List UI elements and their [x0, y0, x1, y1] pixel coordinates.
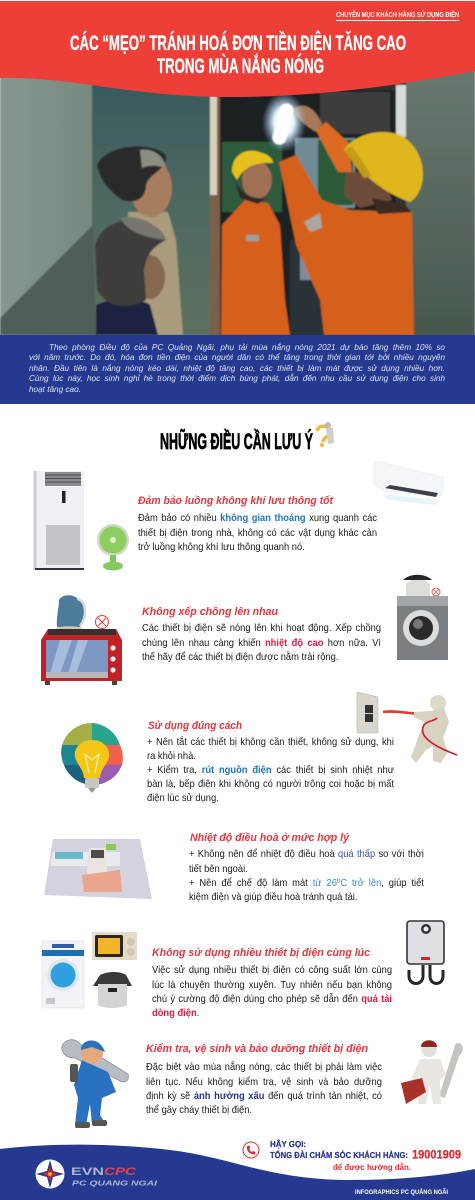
- body text: bàn là, bếp điện khi không có người trông coi hoặc bị mất: [147, 779, 394, 790]
- body text: [138, 513, 377, 553]
- heading: things to note: NHỮNG ĐIỀU CẦN LƯU Ý: [160, 429, 313, 454]
- logo: EVNCPC PC Quang Ngai: PC QUANG NGAI: [72, 1178, 158, 1188]
- body text: + Không nên để nhiệt độ điều hoà quá thấp so với thời: [189, 849, 424, 860]
- intro text: với năm trước. Do đó, hóa đơn tiền điện của người dân có thể tăng trong thời gian tới bởi nhiều nguyên: [29, 353, 445, 362]
- icon: washing machine with rice cooker: [397, 574, 448, 660]
- body text: kiệm điện và giúp điều hoà tránh quá tải.: [189, 892, 357, 903]
- body text: thế hãy để các thiết bị điện được nằm trải rộng.: [142, 652, 338, 663]
- icon: green fan: [97, 524, 129, 570]
- body text: thiết bị điện trong nhà, không có các vật dụng khác cản: [138, 528, 377, 538]
- icon: blue washing machine: [42, 940, 84, 1008]
- person: worker on right reaching up: [279, 106, 423, 335]
- header: photo and red banner: [0, 1, 475, 335]
- panel: air conditioner temperature tip: [44, 832, 424, 903]
- panel: blue introduction band: [0, 335, 475, 404]
- intro text: [29, 342, 445, 394]
- panel: correct use tip: [61, 692, 458, 804]
- body text: Đặc biệt vào mùa nắng nóng, các thiết bị phải làm việc: [146, 1062, 382, 1073]
- icon: forbidden mark on oven: [95, 615, 109, 629]
- icon: figure pulling plug: [382, 695, 458, 763]
- title: TRONG MÙA NẮNG NÓNG: [157, 54, 324, 78]
- title: [70, 31, 406, 78]
- body text: + Nên để chế độ làm mát từ 26ºC trở lên, giúp tiết: [189, 878, 424, 889]
- body text: lúc là chuyện thường xuyên. Tuy nhiên nếu bạn không: [152, 980, 392, 990]
- panel: airflow tip: [34, 462, 444, 570]
- body text: dòng điện.: [152, 1008, 199, 1019]
- panel: multiple appliances tip: [42, 920, 445, 1019]
- body text: Đảm bảo có nhiều không gian thoáng xung quanh các: [138, 513, 377, 524]
- body text: [142, 623, 381, 663]
- icon: microwave: [92, 932, 137, 960]
- icon: rice cooker: [93, 972, 132, 1008]
- credit: INFOGRAPHICS PC QUẢNG NGÃI: [355, 1187, 448, 1196]
- icon: white figure with toolbox: [401, 1040, 463, 1104]
- red banner: [0, 1, 475, 97]
- category label: [336, 10, 459, 21]
- heading: Sử dụng đúng cách: [148, 720, 242, 732]
- body text: trở luồng không khí lưu thông quanh nó.: [138, 542, 305, 553]
- person: man in beige shirt: [97, 146, 183, 335]
- body text: điện lúc sử dụng.: [147, 793, 219, 804]
- logo: EVNCPC PC Quang Ngai: CPC: [104, 1166, 137, 1178]
- heading: Không xếp chồng lên nhau: [142, 606, 278, 618]
- body text: [146, 1061, 382, 1116]
- body text: [147, 736, 394, 804]
- hotline text: TỔNG ĐÀI CHĂM SÓC KHÁCH HÀNG:: [270, 1149, 408, 1160]
- footer: blue wave: [0, 1138, 475, 1200]
- person: worker in centre with yellow helmet: [221, 151, 290, 335]
- logo: EVNCPC PC Quang Ngai: [36, 1160, 158, 1188]
- hotline text: để được hướng dẫn.: [333, 1162, 411, 1172]
- icon: wall air conditioner: [374, 462, 444, 505]
- section heading with icon: [160, 422, 334, 454]
- body text: liên tục. Nếu không kiểm tra, vệ sinh và bảo dưỡng: [146, 1076, 382, 1088]
- icon: question mark figure: [317, 422, 334, 447]
- body text: chúng lên nhau càng khiến nhiệt độ cao hơn nữa. Vì: [142, 638, 381, 648]
- body text: ra khỏi nhà.: [147, 751, 196, 762]
- heading: Nhiệt độ điều hoà ở mức hợp lý: [190, 832, 350, 844]
- hotline text: 19001909: [412, 1150, 461, 1162]
- body text: tiết bên ngoài.: [189, 864, 248, 874]
- intro text: Cùng lúc này, học sinh nghỉ hè trong thời điểm dịch bùng phát, dẫn đến nhu cầu sử dụng điện cho sinh: [29, 374, 445, 383]
- body text: + Kiểm tra, rút nguồn điện các thiết bị sinh nhiệt như: [147, 765, 394, 776]
- hotline text: HẬY GỌI:: [270, 1138, 306, 1149]
- photo: electricity workers changing a light: [0, 70, 475, 336]
- icon: remote and air conditioner photo: [44, 839, 152, 899]
- icon: kettle on oven: [41, 595, 122, 685]
- panel: maintenance tip: [62, 1040, 463, 1128]
- intro text: hoạt tăng cao.: [29, 384, 81, 394]
- body text: Việc sử dụng nhiều thiết bị điện có công suất lớn cùng: [152, 965, 392, 976]
- icon: mechanic with wrench: [62, 1040, 129, 1128]
- heading: Không sử dụng nhiều thiết bị điện cùng lúc: [152, 946, 370, 958]
- light bulb: [262, 92, 306, 152]
- icon: phone: [243, 1142, 259, 1158]
- intro text: nhân. Đầu tiên là nắng nóng kéo dài, nhiệt độ tăng cao, các thiết bị làm mát được sử dụng nhiều hơn.: [29, 364, 445, 372]
- intro text: Theo phòng Điều độ của PC Quảng Ngãi, phụ tải mùa nắng nóng 2021 dự báo tăng thêm 10% so: [49, 342, 445, 352]
- icon: floor air conditioner: [34, 471, 84, 570]
- body text: chú ý cường độ điện dùng cho phép sẽ dẫn đến quá tải: [152, 994, 392, 1005]
- heading: Đảm bảo luồng không khí lưu thông tốt: [138, 495, 334, 507]
- body text: Các thiết bị điện sẽ nóng lên khi hoạt động. Xếp chồng: [142, 623, 381, 634]
- heading: Kiểm tra, vệ sinh và bảo dưỡng thiết bị điện: [146, 1043, 368, 1055]
- panel: do not stack tip: [41, 574, 448, 685]
- hotline text: [270, 1138, 461, 1172]
- logo: EVNCPC PC Quang Ngai: EVN: [71, 1166, 104, 1178]
- body text: [189, 848, 424, 903]
- person: older woman: [95, 217, 166, 335]
- body text: định kỳ sẽ ảnh hưởng xấu đến quá trình tản nhiệt, có: [146, 1091, 382, 1102]
- icon: water heater: [406, 920, 445, 985]
- icon: wall socket: [356, 692, 378, 734]
- body text: + Nên tắt các thiết bị không cần thiết, không sử dụng, khi: [147, 736, 394, 748]
- body text: thể gây cháy thiết bị điện.: [146, 1105, 252, 1116]
- body text: [152, 965, 392, 1019]
- icon: puzzle light bulb: [61, 723, 123, 793]
